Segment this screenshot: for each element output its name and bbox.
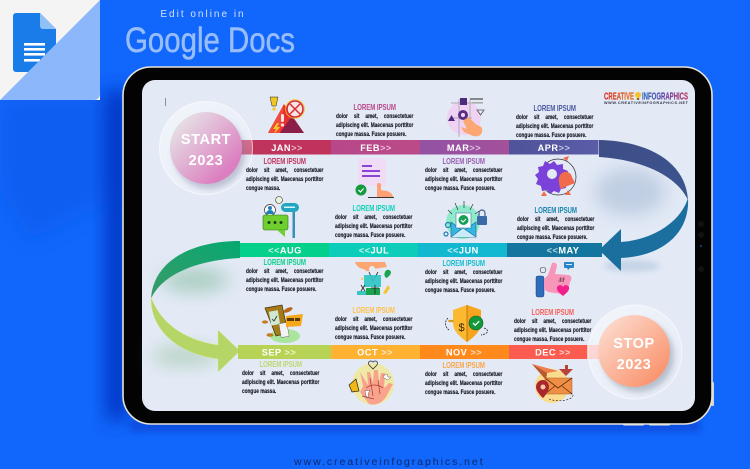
text block: September: adipiscing elit. Maecenas porttitor — [242, 379, 319, 386]
text: LOREM IPSUM — [532, 306, 574, 316]
label: MAY: <<MAY — [547, 246, 579, 256]
start badge — [160, 102, 252, 194]
text block: March — [425, 156, 502, 192]
icon: thumbs up — [536, 262, 574, 297]
icon: dollar shield: $ — [458, 322, 465, 334]
text block: August — [246, 256, 324, 293]
text block: December: adipiscing elit. Maecenas porttitor — [514, 327, 591, 334]
text block: July — [335, 202, 412, 239]
text block: April — [516, 102, 594, 139]
text block: December: dolor sit amet, consectetuer — [514, 318, 591, 325]
text block: October: adipiscing elit. Maecenas porttitor — [335, 325, 412, 332]
logo: Creative Infographics: CREATIVE — [604, 90, 634, 102]
arrow: April to May curve — [599, 140, 688, 271]
icon: dollar shield — [445, 305, 488, 342]
label: MAR: MAR>> — [447, 143, 481, 153]
icon: warning triangle — [268, 97, 304, 134]
text block: August: adipiscing elit. Maecenas porttitor — [246, 277, 323, 284]
text block: April: adipiscing elit. Maecenas porttitor — [516, 123, 593, 130]
label: AUG: <<AUG — [268, 246, 302, 256]
icon: palm reading — [349, 361, 394, 405]
text block: May: adipiscing elit. Maecenas porttitor — [517, 225, 594, 232]
text block: July: adipiscing elit. Maecenas porttitor — [335, 223, 412, 230]
text: LOREM IPSUM — [534, 102, 576, 112]
icon: secure mail — [444, 201, 487, 239]
icon: target and pointing hand — [447, 98, 484, 137]
text: LOREM IPSUM — [264, 256, 306, 266]
text: LOREM IPSUM — [264, 156, 306, 166]
label: JAN: JAN>> — [271, 143, 303, 153]
label: JUN: <<JUN — [447, 246, 479, 256]
start badge: 2023 — [189, 153, 223, 169]
text block: June — [425, 258, 502, 294]
stop badge: STOP — [613, 336, 655, 352]
text block: June: adipiscing elit. Maecenas porttitor — [425, 278, 502, 285]
label: JUL: <<JUL — [359, 246, 389, 256]
text block: March: dolor sit amet, consectetuer — [425, 167, 502, 174]
text block: February: dolor sit amet, consectetuer — [336, 113, 413, 120]
heading: Google Docs: Google Docs — [125, 21, 295, 60]
logo: Creative Infographics: WWW.CREATIVEINFOGRAPHICS.NET — [604, 101, 689, 105]
timeline row 1 — [240, 140, 598, 154]
text: LOREM IPSUM — [443, 360, 485, 370]
icon: envelope and paper plane — [532, 364, 573, 403]
icon: gear and bell — [535, 156, 576, 196]
text: LOREM IPSUM — [535, 204, 577, 214]
text block: August: dolor sit amet, consectetuer — [246, 268, 323, 275]
text: LOREM IPSUM — [353, 202, 395, 212]
corner ribbon with Google Docs icon — [0, 0, 100, 100]
text block: January: adipiscing elit. Maecenas porttitor — [246, 176, 323, 183]
text block: October: dolor sit amet, consectetuer — [335, 316, 412, 323]
icon: chat bubbles — [263, 196, 299, 238]
timeline row 2 — [240, 243, 602, 257]
soft shadow of blue arrow — [594, 168, 666, 216]
text block: November: congue massa. Fusce posuere. — [425, 389, 495, 396]
text block: September: congue massa. — [242, 388, 276, 395]
text block: September — [242, 358, 320, 395]
text block: June: dolor sit amet, consectetuer — [425, 269, 502, 276]
tablet frame — [123, 67, 714, 426]
text block: February: congue massa. Fusce posuere. — [336, 131, 406, 138]
caption: edit online in: Edit online in — [160, 9, 246, 20]
text block: June: congue massa. Fusce posuere. — [425, 287, 495, 294]
text block: May — [517, 204, 594, 241]
text block: May: dolor sit amet, consectetuer — [517, 216, 594, 223]
icon: document checklist and hand — [356, 158, 394, 198]
text: LOREM IPSUM — [353, 304, 395, 314]
soft shadow of green arrow — [161, 268, 229, 292]
text block: November: adipiscing elit. Maecenas porttitor — [425, 380, 502, 387]
label: SEP: SEP >> — [262, 348, 296, 358]
tablet screen — [142, 80, 695, 411]
text block: July: dolor sit amet, consectetuer — [335, 214, 412, 221]
text block: May: congue massa. Fusce posuere. — [517, 234, 587, 241]
text: LOREM IPSUM — [443, 258, 485, 268]
logo: Creative Infographics: INFOGRAPHICS — [642, 90, 688, 102]
text block: December — [514, 306, 592, 343]
text block: April: congue massa. Fusce posuere. — [516, 132, 586, 139]
icon: hand and shopping tags — [355, 262, 391, 295]
text block: April: dolor sit amet, consectetuer — [516, 114, 593, 121]
timeline row 3 — [238, 345, 601, 359]
text block: October: congue massa. Fusce posuere. — [335, 334, 405, 341]
label: OCT: OCT >> — [357, 348, 393, 358]
text block: February — [336, 102, 414, 138]
label: NOV: NOV >> — [446, 348, 482, 358]
stop badge: 2023 — [617, 357, 651, 373]
label: APR: APR>> — [538, 143, 570, 153]
text block: March: adipiscing elit. Maecenas porttitor — [425, 176, 502, 183]
text block: July: congue massa. Fusce posuere. — [335, 232, 405, 239]
text: LOREM IPSUM — [443, 156, 485, 166]
text block: August: congue massa. Fusce posuere. — [246, 286, 316, 293]
text block: February: adipiscing elit. Maecenas porttitor — [336, 122, 413, 129]
text block: March: congue massa. Fusce posuere. — [425, 185, 495, 192]
label: FEB: FEB>> — [360, 143, 392, 153]
footer website: www.creativeinfographics.net — [293, 456, 485, 468]
text block: January — [246, 156, 324, 192]
label: DEC: DEC >> — [535, 348, 571, 358]
stop badge — [588, 305, 682, 399]
icon: payment terminal — [262, 305, 303, 343]
text: LOREM IPSUM — [260, 358, 302, 368]
text: LOREM IPSUM — [354, 102, 396, 112]
text block: December: congue massa. Fusce posuere. — [514, 336, 584, 343]
arrow: August to September curve — [151, 241, 240, 372]
logo: Creative Infographics — [604, 90, 689, 105]
text block: October — [335, 304, 412, 341]
text block: January: dolor sit amet, consectetuer — [246, 167, 323, 174]
text block: January: congue massa. — [246, 185, 280, 192]
text block: September: dolor sit amet, consectetuer — [242, 370, 319, 377]
start badge: START — [181, 132, 231, 148]
icon: document — [13, 13, 56, 72]
text block: November: dolor sit amet, consectetuer — [425, 371, 502, 378]
text block: November — [425, 360, 502, 396]
